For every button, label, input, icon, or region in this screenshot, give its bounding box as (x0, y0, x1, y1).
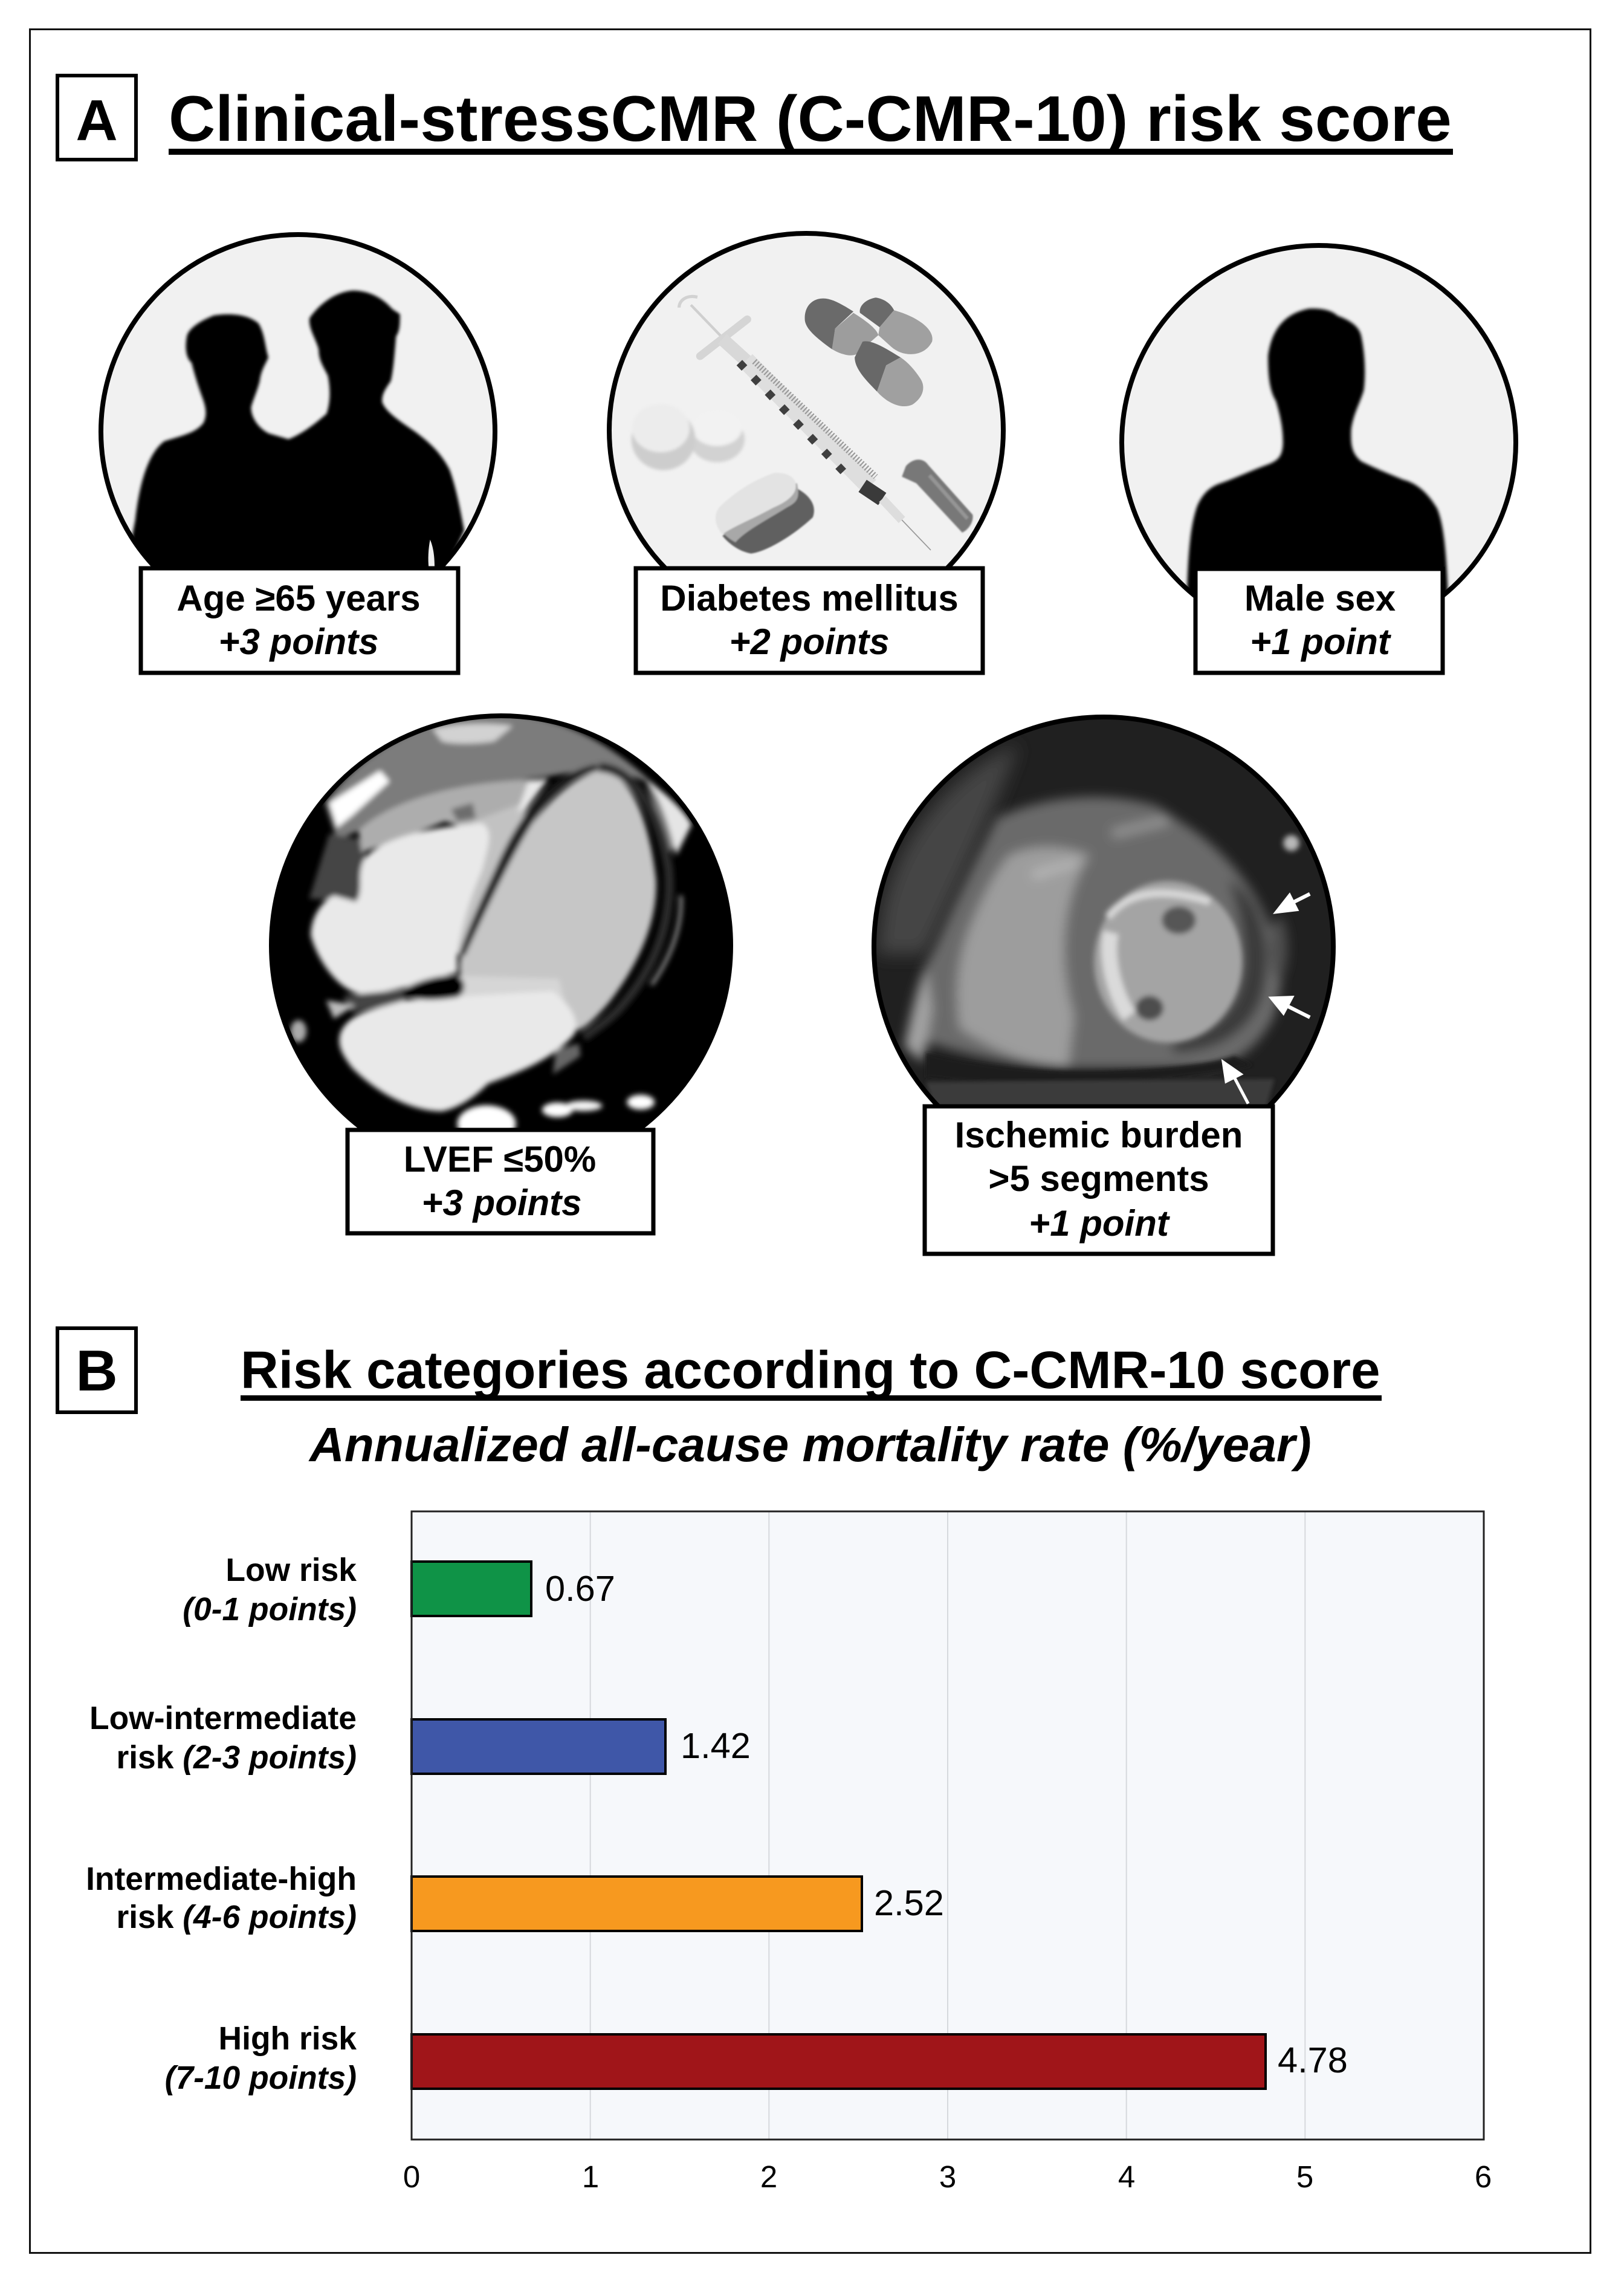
image: stress perfusion CMR short-axis view with arrows (872, 715, 1336, 1104)
bar values: 0.67 (545, 1568, 615, 1609)
label: diabetes: Diabetes mellitus (660, 578, 959, 618)
label: diabetes (636, 568, 983, 673)
syringe (679, 296, 931, 550)
x-axis ticks: 5 (1296, 2159, 1313, 2194)
bar: high risk (412, 2034, 1266, 2089)
label: male sex (1195, 569, 1443, 673)
label: ischemic burden: Ischemic burden (955, 1115, 1243, 1155)
panel letter B (57, 1328, 136, 1412)
x-axis ticks: 2 (760, 2159, 777, 2194)
label: age: Age ≥65 years (176, 578, 421, 618)
x-axis ticks: 4 (1118, 2159, 1135, 2194)
x-axis ticks: 6 (1475, 2159, 1492, 2194)
capsules (805, 297, 933, 406)
panel B: risk categories (57, 1328, 1492, 2194)
heading: panel B: Risk categories according to C-CMR-10 score (241, 1341, 1380, 1400)
label: LVEF: LVEF ≤50% (404, 1139, 596, 1179)
x-axis ticks: 3 (939, 2159, 956, 2194)
bar values: 2.52 (874, 1883, 944, 1923)
x-axis ticks: 0 (403, 2159, 420, 2194)
label: age: +3 points (218, 621, 379, 662)
x-axis ticks: 1 (582, 2159, 599, 2194)
category labels: Intermediate-high (86, 1861, 357, 1897)
bar: low risk (412, 1562, 531, 1616)
label: LVEF (348, 1130, 653, 1233)
label: male sex: +1 point (1250, 621, 1392, 662)
icon: two silhouettes, age (99, 232, 497, 566)
label: age (141, 568, 458, 673)
image: cine CMR four-chamber view (271, 713, 731, 1175)
category labels: Low-intermediate (89, 1701, 357, 1736)
category labels (86, 1553, 357, 2096)
label: ischemic burden (925, 1106, 1273, 1254)
category labels: High risk (219, 2021, 357, 2057)
label: male sex: Male sex (1244, 578, 1396, 618)
label: LVEF: +3 points (421, 1183, 582, 1223)
icon: syringe and pills, diabetes (607, 231, 1006, 566)
bar values: 1.42 (681, 1725, 751, 1766)
category labels: risk (2-3 points) (116, 1740, 357, 1776)
category labels: Low risk (225, 1553, 357, 1588)
bar values (545, 1568, 1348, 2080)
tablets, capsule and tube (630, 421, 746, 472)
bar: intermediate-high risk (412, 1877, 862, 1931)
icon: male silhouette (1122, 245, 1516, 640)
panel letter A: A (76, 88, 118, 153)
bar: low-intermediate risk (412, 1719, 665, 1774)
label: ischemic burden: >5 segments (988, 1158, 1209, 1199)
panel A: risk score (57, 76, 1516, 1254)
heading: panel A: Clinical-stressCMR (C-CMR-10) risk score (169, 82, 1452, 155)
label: ischemic burden: +1 point (1029, 1203, 1171, 1244)
bar chart: annualized mortality (86, 1511, 1492, 2194)
category labels: risk (4-6 points) (116, 1900, 357, 1935)
panel letter A (57, 76, 136, 160)
category labels: (7-10 points) (165, 2060, 357, 2096)
arrows (1221, 892, 1310, 1104)
panel letter B: B (76, 1338, 118, 1403)
subheading: Annualized all-cause mortality rate (%/year) (308, 1417, 1312, 1471)
bar values: 4.78 (1278, 2040, 1348, 2080)
label: diabetes: +2 points (729, 621, 890, 662)
x-axis ticks (403, 2159, 1492, 2194)
category labels: (0-1 points) (183, 1592, 357, 1627)
